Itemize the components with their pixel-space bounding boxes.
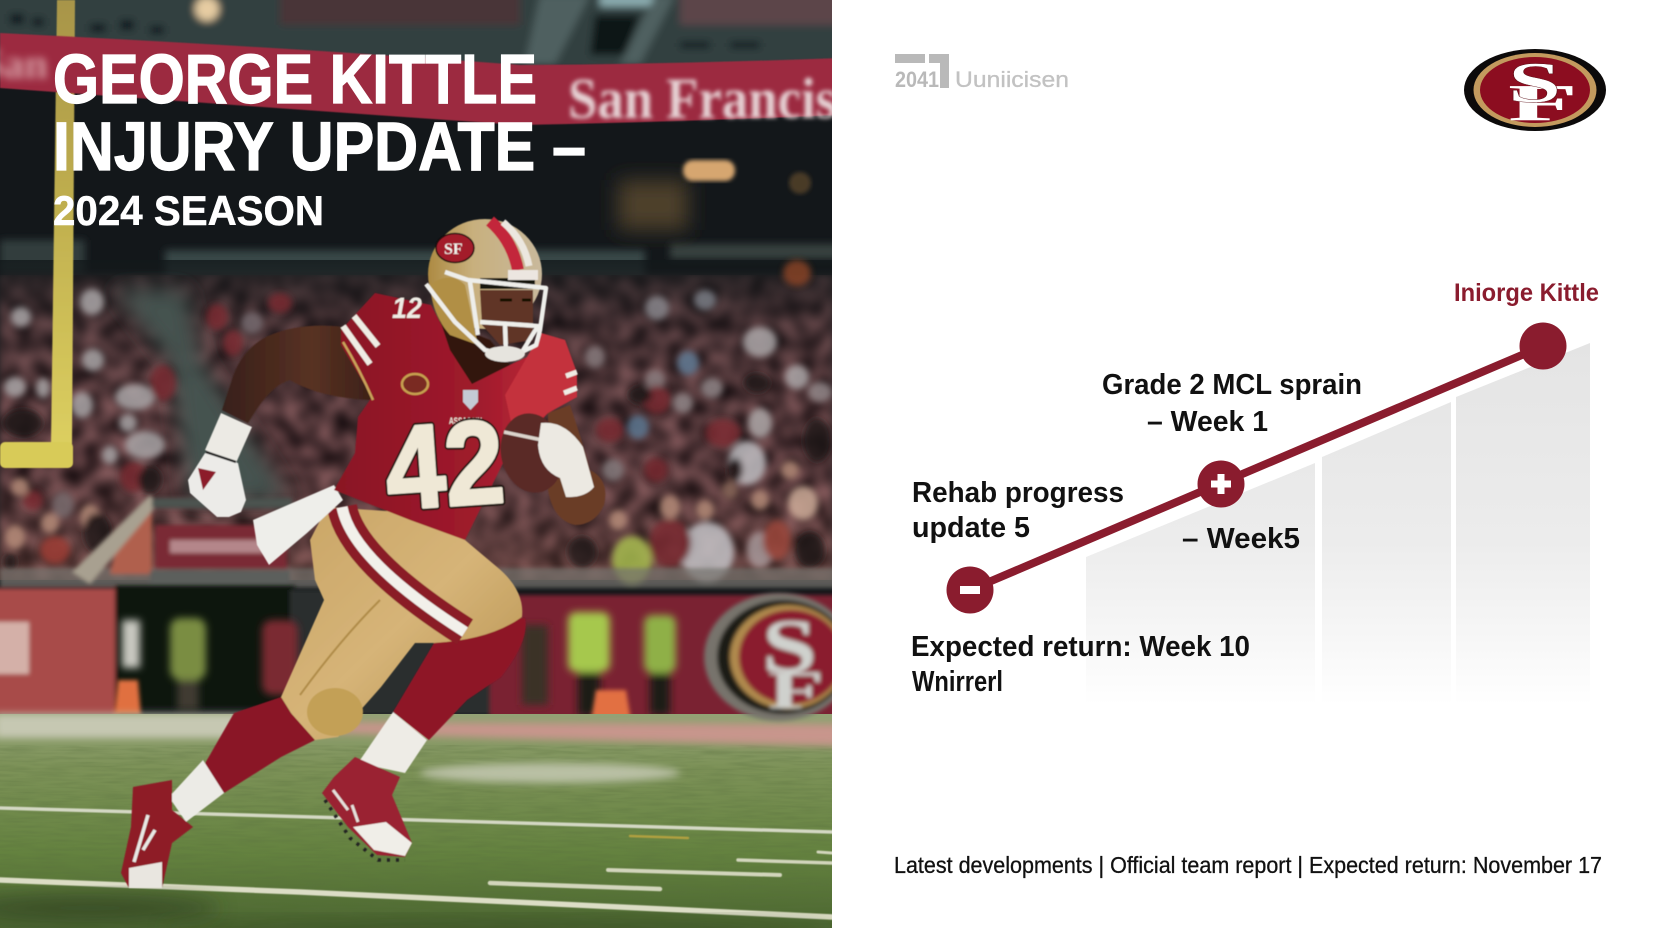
title <box>53 40 586 234</box>
field <box>0 714 832 928</box>
right forearm <box>548 405 605 525</box>
footer text: Latest developments | Official team report | Expected return: November 17 <box>894 852 1602 878</box>
jersey wordmark: ASSASSIN <box>449 416 482 426</box>
subtitle: 2024 SEASON <box>53 187 324 234</box>
wall logo <box>704 593 854 721</box>
railing and signage <box>0 495 840 588</box>
helmet stripe <box>490 221 518 270</box>
shadow under player <box>0 894 220 922</box>
icon: SF team logo: F <box>1508 74 1578 132</box>
gray header mark <box>895 54 1069 92</box>
collar trim <box>343 342 373 400</box>
photo background: blurred stadium <box>0 0 850 928</box>
helmet: SF <box>444 241 463 258</box>
label: expected return <box>911 631 1250 698</box>
football <box>500 412 558 492</box>
jersey number 42: 42 <box>381 396 508 536</box>
back cleat <box>121 780 193 888</box>
sleeve stripes <box>343 316 378 364</box>
label: expected return: Expected return: Week 10 <box>911 631 1250 663</box>
crowd spectators <box>3 260 832 584</box>
chart bars <box>1086 343 1590 705</box>
label: grade 2 sprain: Grade 2 MCL sprain <box>1102 369 1362 401</box>
neck <box>440 320 510 384</box>
pants stripes <box>342 507 465 632</box>
marker: plus <box>1198 460 1244 508</box>
label: week 5: – Week5 <box>1182 523 1300 555</box>
stadium light <box>683 160 811 194</box>
field lines <box>0 808 832 917</box>
helmet <box>426 219 546 362</box>
right glove <box>538 423 594 497</box>
helmet logo <box>436 234 474 262</box>
crowd texture <box>0 275 832 580</box>
marker: minus <box>946 566 994 614</box>
face <box>480 290 533 345</box>
label: grade 2 sprain <box>1102 369 1362 438</box>
icon: SF team logo: S <box>1508 51 1561 115</box>
jersey number 42: 42 <box>381 396 508 536</box>
chart: recovery timeline <box>911 279 1599 705</box>
lower wall <box>0 586 840 720</box>
upper deck <box>0 0 850 70</box>
stadium banner with San Francisco lettering <box>0 32 832 126</box>
wall logo: F <box>768 661 824 720</box>
marker: end point <box>1520 322 1566 370</box>
player <box>121 219 605 888</box>
jersey <box>334 292 577 540</box>
icon: SF team logo <box>1464 49 1606 132</box>
wall logo: S <box>762 605 817 689</box>
front cleat <box>322 757 412 860</box>
title line 2: INJURY UPDATE – <box>53 108 586 185</box>
trend line <box>970 346 1543 590</box>
back leg sock <box>203 697 315 793</box>
label: rehab progress <box>912 477 1124 544</box>
label: rehab progress: update 5 <box>912 512 1030 544</box>
label: rehab progress: Rehab progress <box>912 477 1124 509</box>
shoulder number: 12 <box>392 292 422 325</box>
front leg sock <box>393 618 526 740</box>
label: expected return: Wnirrerl <box>912 666 1003 698</box>
gold pants <box>281 507 522 740</box>
header word: Uuniicisen <box>955 67 1069 92</box>
panel: stadium photo with player <box>0 0 886 928</box>
mid stand band <box>0 240 840 580</box>
background people and cones <box>122 612 676 716</box>
chest patch <box>402 374 428 394</box>
towel <box>253 485 343 565</box>
facemask <box>426 272 546 357</box>
wrist band <box>205 413 252 463</box>
label: player name: Iniorge Kittle <box>1454 279 1599 307</box>
title line 1: GEORGE KITTLE <box>53 40 537 118</box>
left arm <box>222 326 372 423</box>
label: grade 2 sprain: – Week 1 <box>1147 406 1268 438</box>
front leg white sock <box>358 712 427 773</box>
goal post <box>0 0 75 468</box>
header year: 2041 <box>895 67 939 92</box>
shield <box>463 390 478 410</box>
jersey number 42 <box>384 416 506 512</box>
back leg white sock <box>169 760 224 822</box>
left glove <box>188 452 246 517</box>
stadium banner with San Francisco lettering: San Francisco <box>568 66 886 131</box>
